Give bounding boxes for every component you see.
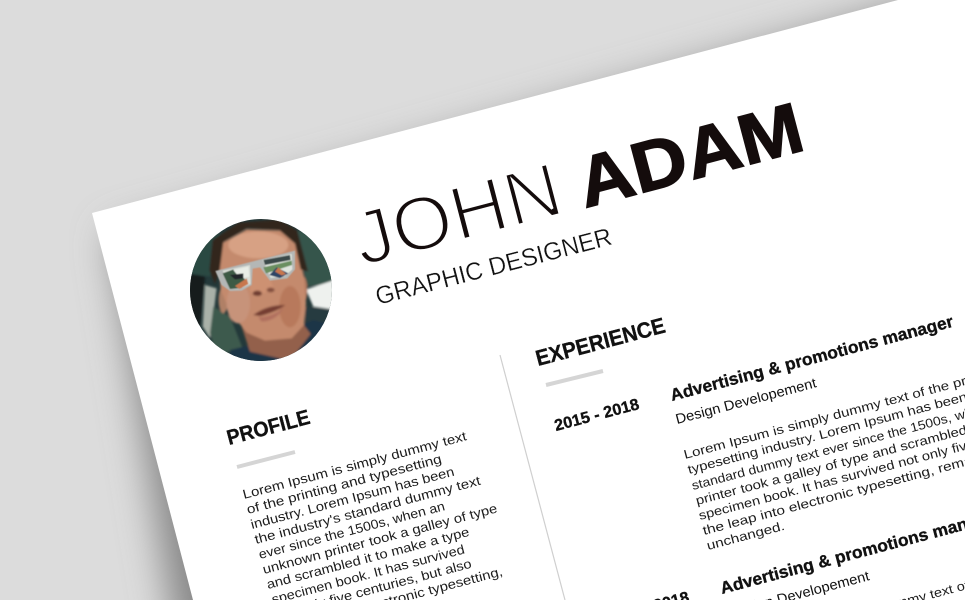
heading underline: experience [546,371,603,385]
job entry 2 [603,505,965,600]
heading underline: profile [237,452,295,467]
heading: profile: PROFILE [224,406,312,450]
portrait photo [187,219,337,367]
profile text: industry. Lorem Ipsum has been [249,464,456,532]
job entry 1 [553,312,965,553]
profile text [241,428,504,600]
column divider [500,355,565,600]
profile text: ever since the 1500s, when an [257,498,446,562]
profile text: unknown printer took a galley of type [261,501,499,577]
department: Design Developement [674,374,818,427]
icon: sunglasses [215,251,295,291]
panel: experience [533,312,965,600]
name: JOHN [345,147,570,282]
heading: experience: EXPERIENCE [533,313,668,371]
dates: 2015 - 2018 [553,396,641,435]
name: ADAM [569,88,811,223]
description [682,357,965,553]
profile text: of the printing and typesetting [245,451,443,517]
panel: profile [224,406,504,600]
job title: GRAPHIC DESIGNER [372,223,615,311]
profile text: and scrambled it to make a type [265,524,471,592]
profile text: Lorem Ipsum is simply dummy text [241,428,469,502]
name [345,88,811,282]
profile text: the industry's standard dummy text [253,473,482,547]
job title: Advertising & promotions manager [668,312,956,405]
description: unchanged. [705,519,786,553]
